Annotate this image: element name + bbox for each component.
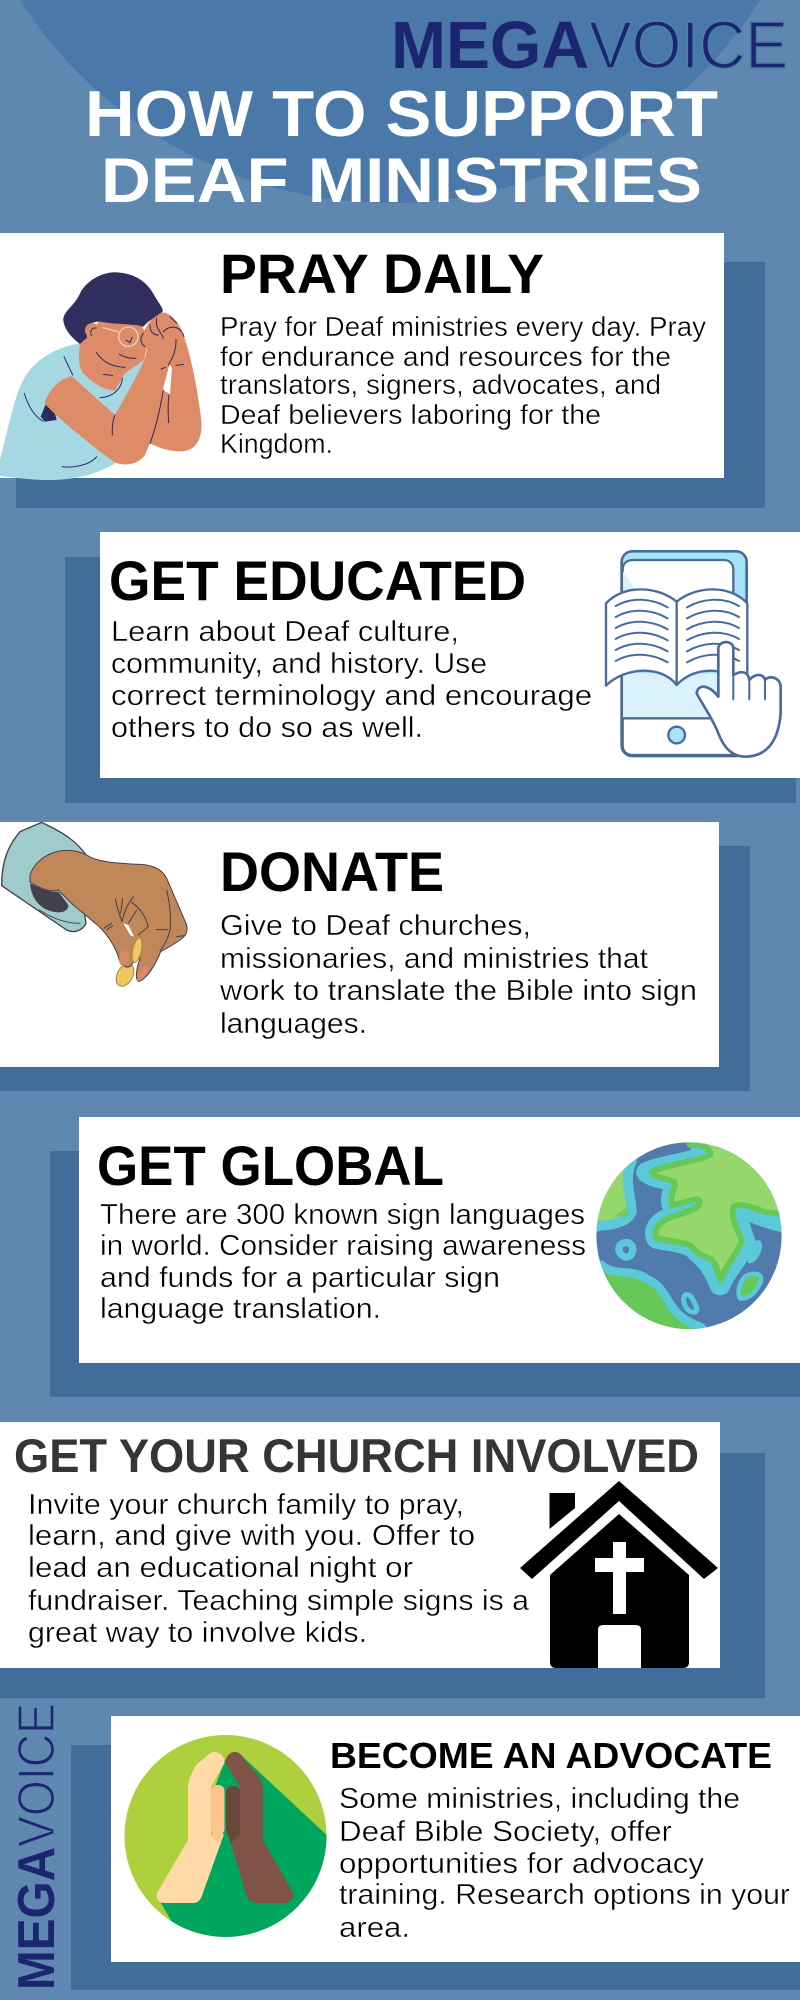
text: pray daily body: Kingdom. — [220, 428, 333, 459]
logo: MegaVoice side — [8, 1703, 66, 1990]
heading: pray daily: PRAY DAILY — [220, 242, 544, 305]
logo: MegaVoice top: VOICE — [589, 8, 788, 83]
text: advocate body: training. Research options in your — [339, 1879, 790, 1911]
text: get global body: There are 300 known sign languages — [100, 1199, 585, 1231]
icon: phone with open book — [606, 551, 781, 757]
text: church body: great way to involve kids. — [28, 1617, 367, 1649]
text: donate body: languages. — [220, 1008, 367, 1040]
panel: get educated — [65, 532, 800, 803]
icon: hand dropping coin — [2, 822, 187, 989]
text: donate body: missionaries, and ministries that — [220, 943, 648, 975]
heading: get educated: GET EDUCATED — [109, 549, 526, 612]
panel: get global — [50, 1117, 800, 1397]
text: pray daily body: Pray for Deaf ministries every day. Pray — [220, 311, 706, 342]
text: get global body: in world. Consider raising awareness — [100, 1230, 586, 1262]
title — [85, 77, 718, 216]
text: advocate body: area. — [339, 1912, 410, 1944]
text: church body: learn, and give with you. Offer to — [28, 1520, 475, 1552]
text: advocate body: Some ministries, including the — [339, 1783, 740, 1815]
text: get global body: and funds for a particular sign — [100, 1262, 500, 1294]
text: get global body: language translation. — [100, 1293, 381, 1325]
text: donate body — [219, 910, 697, 1040]
text: get educated body: Learn about Deaf culture, — [111, 616, 459, 648]
text: pray daily body: for endurance and resources for the — [220, 341, 671, 372]
heading: get global: GET GLOBAL — [97, 1134, 444, 1197]
text: donate body: Give to Deaf churches, — [220, 910, 531, 942]
logo: MegaVoice side: VOICE — [8, 1703, 66, 1847]
text: get educated body: correct terminology and encourage — [111, 680, 592, 712]
heading: get your church involved: GET YOUR CHURCH INVOLVED — [14, 1429, 699, 1482]
panel: become an advocate — [71, 1716, 800, 1990]
text: get global body — [100, 1199, 586, 1325]
text: advocate body: Deaf Bible Society, offer — [339, 1816, 672, 1848]
text: get educated body — [111, 616, 592, 744]
logo: MegaVoice top: MEGA — [391, 8, 589, 83]
panel: get your church involved — [0, 1422, 765, 1698]
title: HOW TO SUPPORT — [85, 77, 718, 150]
text: pray daily body: Deaf believers laboring for the — [220, 399, 601, 430]
text: church body: fundraiser. Teaching simple signs is a — [28, 1585, 530, 1617]
icon: church house — [520, 1481, 718, 1668]
icon: globe — [596, 1142, 782, 1329]
text: get educated body: others to do so as well. — [111, 712, 423, 744]
heading: donate: DONATE — [220, 840, 444, 903]
text: advocate body: opportunities for advocacy — [339, 1848, 705, 1880]
text: church body: Invite your church family to pray, — [28, 1489, 464, 1521]
panel: donate — [0, 822, 750, 1091]
text: pray daily body — [220, 311, 706, 459]
heading: become an advocate: BECOME AN ADVOCATE — [330, 1735, 772, 1776]
text: get educated body: community, and history. Use — [111, 648, 487, 680]
text: church body: lead an educational night or — [28, 1552, 413, 1584]
panel: pray daily — [0, 233, 765, 508]
title: DEAF MINISTRIES — [101, 146, 702, 216]
text: advocate body — [339, 1783, 790, 1944]
text: pray daily body: translators, signers, advocates, and — [220, 369, 661, 400]
text: donate body: work to translate the Bible into sign — [219, 975, 697, 1007]
logo: MegaVoice side: MEGA — [8, 1847, 66, 1990]
icon: praying person — [0, 272, 202, 480]
logo: MegaVoice top — [391, 8, 788, 83]
icon: praying hands — [124, 1735, 330, 1945]
text: church body — [28, 1489, 530, 1649]
